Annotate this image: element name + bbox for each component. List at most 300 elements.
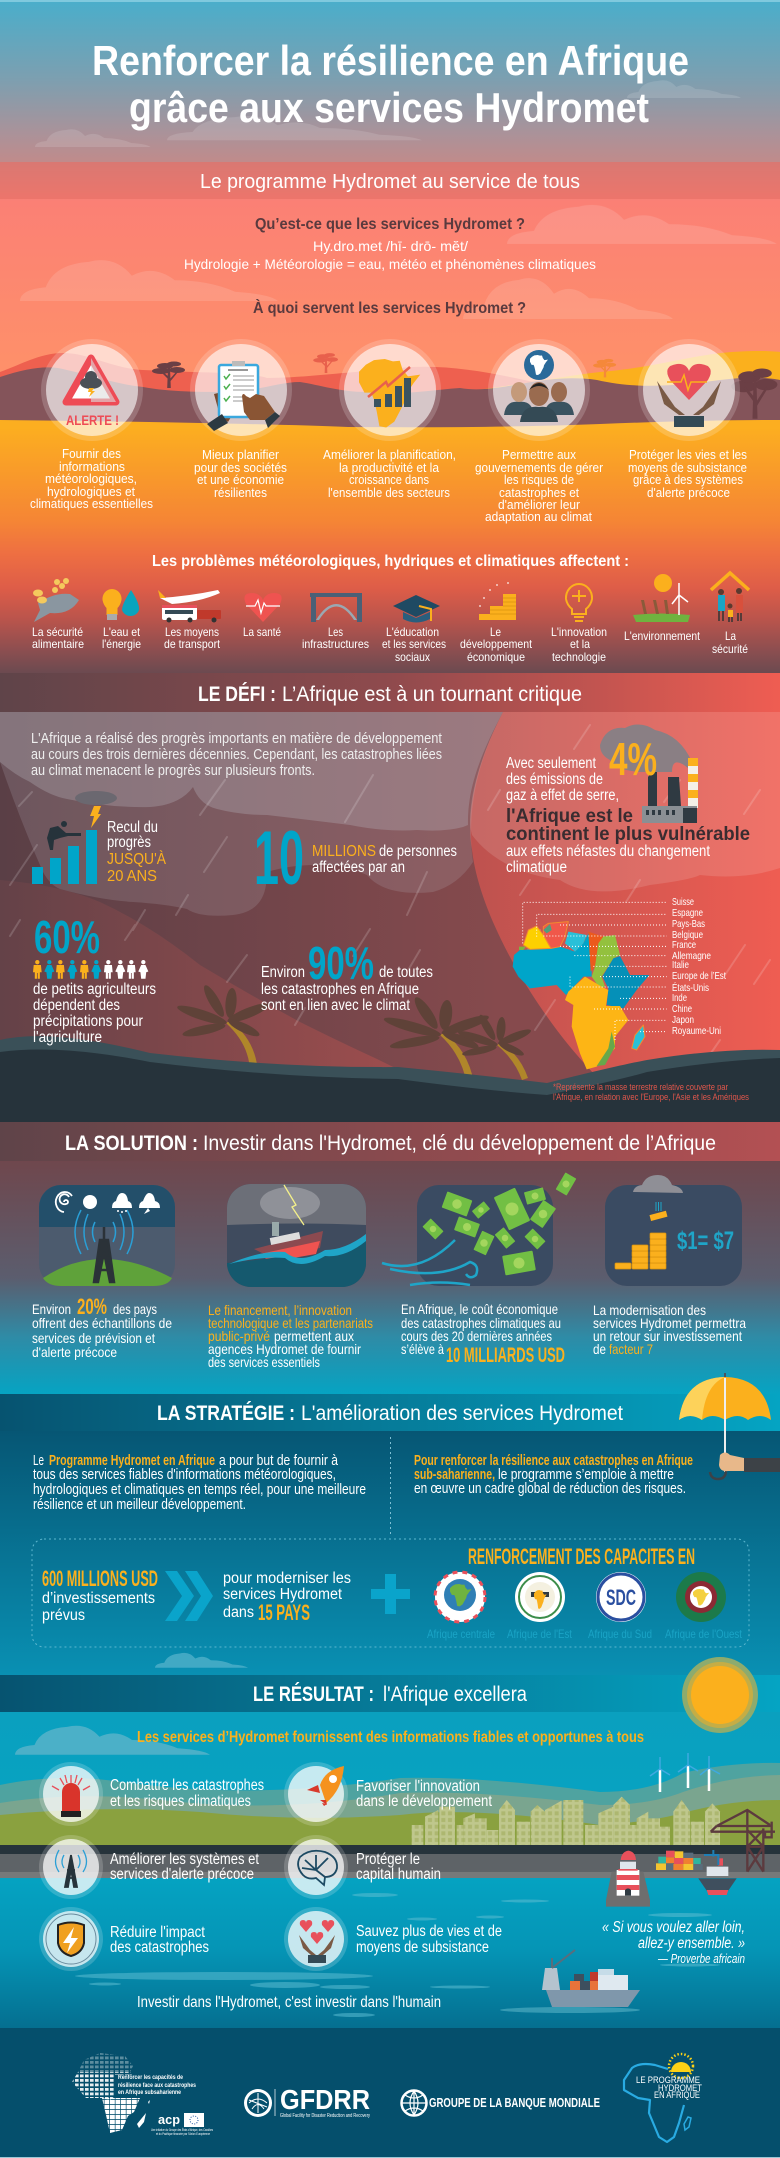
landscape hills [0,351,780,430]
caption: technologie [552,650,606,664]
caption: d'améliorer leur [498,498,580,512]
quote: — Proverbe africain [657,1951,745,1966]
logo: World Bank [402,2090,600,2116]
logo: west Africa: Afrique de l'Ouest [665,1627,743,1641]
panel: investment box [32,1539,749,1647]
icon: bridge [310,593,362,622]
alert label: ALERTE ! [66,412,119,428]
icon: clipboard [207,361,280,431]
stat: progress setback: progrès [107,834,151,851]
logo: southern Africa: Afrique du Sud [588,1627,652,1641]
logo: Hydromet Africa: EN AFRIQUE [654,2090,700,2101]
text: programme: tous des services fiables d'informations météorologiques, [33,1467,336,1483]
icon: plus [371,1574,410,1614]
intro text: au climat menacent le progrès sur plusieurs fronts. [31,763,315,779]
banner: la stratégie: L'amélioration des services Hydromet [301,1402,623,1425]
sector: security [711,573,749,656]
caption: Améliorer la planification, [323,448,456,462]
quote: « Si vous voulez aller loin, [602,1919,745,1936]
text: resilience framework: sub-saharienne, [414,1467,495,1483]
caption: résilientes [214,486,267,500]
caption [30,447,153,511]
logo: World Bank: GROUPE DE LA BANQUE MONDIALE [429,2096,600,2110]
sky band [0,162,780,199]
text: financing: agences Hydromet de fournir [208,1341,361,1357]
partner caption [151,2127,213,2136]
logo: resilience programme: en Afrique subsaharienne [118,2089,181,2096]
caption: La [725,629,736,643]
text: programme: Le [33,1453,44,1469]
icon: africa chart [359,359,420,427]
stat: progress setback: Recul du [107,819,158,836]
caption [382,625,446,664]
text: modernisation: facteur 7 [609,1341,653,1357]
caption: alimentaire [32,637,84,651]
stat: 90 percent: les catastrophes en Afrique [261,981,419,998]
item: combat disasters [39,1762,264,1826]
caption: Les [328,625,343,639]
icon: signal tower [56,1850,86,1887]
item: human capital [284,1835,441,1899]
stat: 60 percent: de petits agriculteurs [33,981,156,998]
text: programme: résilience et un meilleur développement. [33,1497,246,1513]
caption: et les services [382,637,446,651]
caption: croissance dans [349,473,429,487]
icon: coin stacks [615,1233,666,1269]
map legend: France [672,939,696,951]
text: resilience framework: le programme s’emploie à mettre [498,1467,674,1483]
icon: siren [52,1775,90,1817]
icon: brain network [298,1851,337,1885]
text: financing: technologique et les partenariats [208,1315,373,1331]
caption [323,448,456,500]
icon: alert triangle [66,358,116,402]
panel: use 3 growth [323,339,456,500]
icon: falling bars [32,791,117,884]
icon: coin stacks [479,582,516,620]
logo: central Africa: Afrique centrale [427,1627,495,1641]
item: warning systems: Améliorer les systèmes et [110,1851,260,1868]
text: resilience framework [414,1453,693,1497]
caption [302,625,369,651]
logo: Hydromet Africa: LE PROGRAMME [636,2075,700,2086]
map legend: Inde [672,992,687,1004]
sector: education [382,595,446,664]
icon: fish and beans [33,578,79,622]
text: economic cost [401,1301,565,1367]
text: modernisation [593,1302,746,1357]
icon: people row [33,960,148,979]
item: innovation: dans le développement [356,1793,493,1810]
footer [0,2028,780,2158]
panel: la solution [0,1122,780,1395]
caption [164,625,221,651]
stat: progress setback [32,791,167,885]
text: modernise: 15 PAYS [258,1600,310,1625]
caption: Fournir des [62,447,121,461]
text: economic cost: cours des 20 dernières années [401,1328,552,1344]
stat: 600 million [42,1566,158,1624]
stat: 4 percent emissions: l'Afrique est le [506,806,633,827]
sector: environment [624,574,701,643]
text: 20 percent: Environ [32,1301,71,1317]
icon: leaders [504,350,574,422]
map legend [672,896,726,1037]
stat: 60 percent: 60% [34,911,100,963]
caption [628,448,747,500]
cargo ship [500,1950,640,2013]
caption: d'alerte précoce [647,486,730,500]
stat: 4 percent emissions: Avec seulement [506,755,597,772]
trees [152,353,777,419]
banner: le résultat: LE RÉSULTAT : [253,1683,374,1706]
caption: La sécurité [32,625,83,639]
text: 20 percent: d'alerte précoce [32,1344,117,1360]
text: 20 percent: des pays [113,1301,157,1317]
panel: le résultat [0,1657,780,2028]
ship [698,1850,737,1895]
map legend: Chine [672,1003,692,1015]
caption: les risques de [504,473,574,487]
item: human capital: capital humain [356,1866,441,1883]
logo: east Africa [507,1572,573,1641]
text: modernise: services Hydromet [223,1586,343,1603]
partner caption: et du Pacifique financée par l'Union Européenne [156,2132,210,2136]
text: economic cost: des catastrophes climatiques au [401,1315,561,1331]
map legend: Europe de l’Est [672,970,726,982]
text: 20 percent: services de prévision et [32,1330,155,1346]
logo: resilience programme: Renforcer les capacités de [118,2074,183,2081]
ground top edge [0,420,780,430]
caption: adaptation au climat [485,510,592,524]
stat: 90 percent: de toutes [379,964,433,981]
sector: food [32,578,84,651]
panel: use 1 alert [30,339,153,511]
text: economic cost: 10 MILLIARDS USD [446,1344,565,1367]
text: services heading: Les services d’Hydromet fournissent des informations fiables et opportunes à tous [137,1729,644,1746]
text: financing: public-privé [208,1328,270,1344]
item: save lives [284,1907,502,1971]
card: forecast tower [39,1185,175,1286]
item: reduce impact: des catastrophes [110,1939,209,1956]
stat: 10 millions: MILLIONS [312,843,376,860]
item: reduce impact: Réduire l'impact [110,1924,206,1941]
caption: météorologiques, [45,472,137,486]
stat: progress setback: 20 ANS [107,868,157,885]
logo: ACP and EU [158,2112,204,2127]
logo: resilience programme: résilience face aux catastrophes [118,2082,196,2089]
definition block: Hy.dro.met /hī- drō- mĕt/ [313,238,468,254]
caption: sociaux [395,650,430,664]
intro text [31,731,442,779]
stat: 90 percent: Environ [261,964,305,981]
map legend: Italie [672,959,689,971]
logo: west Africa [665,1572,743,1641]
map legend: Espagne [672,907,703,919]
partner caption: Une initiative du Groupe des États d'Afrique, des Caraïbes [151,2127,213,2132]
item: save lives: Sauvez plus de vies et de [356,1923,502,1940]
item: human capital: Protéger le [356,1851,420,1868]
caption [712,629,748,656]
caption: informations [59,460,125,474]
text: 20 percent [32,1294,172,1360]
stat: 4 percent emissions: 4% [609,733,657,785]
background: solution [0,1161,780,1395]
text: resilience framework: en œuvre un cadre global de réduction des risques. [414,1481,686,1497]
stat: 10 millions: de personnes [379,843,457,860]
title: grâce aux services Hydromet [129,84,649,131]
background: orange ground [0,428,780,674]
text: modernise: pour moderniser les [223,1570,351,1587]
text: programme: a pour but de fournir à [219,1453,339,1469]
stat: 60 percent: l'agriculture [33,1029,102,1046]
icon: ship [254,1231,323,1258]
sector: transport [158,590,221,651]
small cloud [155,1653,248,1668]
card: ship in storm [227,1184,366,1287]
caption: l'énergie [102,637,141,651]
item: warning systems: services d'alerte précoce [110,1866,254,1883]
map footnote [553,1082,749,1103]
definition block: Hydrologie + Météorologie = eau, météo et phénomènes climatiques [184,256,596,272]
text: modernise [223,1570,351,1625]
logo: Hydromet Africa: HYDROMET [658,2083,702,2094]
caption: économique [467,650,525,664]
logo: GFDRR: Global Facility for Disaster Reduction and Recovery [280,2113,370,2119]
clouds [20,80,777,319]
lower storm cloud [0,712,503,916]
ground waves [0,1036,780,1122]
road [0,1845,780,1878]
text: modernisation: un retour sur investissement [593,1328,742,1344]
text: modernise: dans [223,1604,254,1621]
map legend: Pays-Bas [672,918,705,930]
icon: chevrons [165,1571,213,1621]
icon: plane, bus, truck [158,590,221,622]
text: financing: des services essentiels [208,1354,320,1370]
text: programme: hydrologiques et climatiques en temps réel, pour une meilleure [33,1482,366,1498]
icon: bulb outline [566,584,592,621]
sector: health [243,593,282,639]
icon: rocket [307,1766,344,1806]
card: money in wind [382,1172,576,1286]
map legend: Suisse [672,896,694,908]
text: modernisation: services Hydromet permettra [593,1315,746,1331]
map legend: Royaume-Uni [672,1025,721,1037]
upper storm cloud [0,712,503,831]
background: défi [0,712,780,1122]
caption: grâce à des systèmes [633,473,743,487]
banner: la solution: Investir dans l'Hydromet, clé du développement de l’Afrique [203,1132,716,1155]
stat: 4 percent emissions [506,724,750,876]
stat: 60 percent: précipitations pour [33,1013,143,1030]
icon: shield [46,1914,96,1964]
caption: L'innovation [551,625,607,639]
mountain [0,880,420,1080]
icon: umbrella and hand [679,1373,780,1479]
icon: banknotes [422,1172,576,1275]
text: financing: Le financement, l’innovation [208,1302,352,1318]
caption: L'environnement [624,629,701,643]
caption: sécurité [712,642,748,656]
stat: 4 percent emissions: climatique [506,859,567,876]
map legend: États-Unis [672,981,709,994]
sector: infrastructure [302,593,369,651]
caption: Le [490,625,501,639]
map footnote: *Représente la masse terrestre relative couverte par [553,1082,728,1093]
caption: Les moyens [165,625,219,639]
panel: use 2 planning [190,339,292,500]
banner: la solution [0,1122,780,1161]
palm trees [176,983,532,1085]
stat: 4 percent emissions: gaz à effet de serre, [506,787,619,804]
text: modernisation: de [593,1341,606,1357]
icon: weather [56,1192,160,1214]
logo: southern Africa: SDC [606,1585,636,1610]
banner: le défi [0,673,780,712]
icon: rain cloud [633,1175,683,1193]
stat: 4 percent emissions: aux effets néfastes du changement [506,843,711,860]
banner: la solution: LA SOLUTION : [65,1132,198,1155]
map: Africa land mass [513,902,667,1069]
intro text: L'Afrique a réalisé des progrès importants en matière de développement [31,731,442,747]
definition block [184,216,596,272]
icon: graduation cap [393,595,440,622]
rain [10,725,770,1116]
caption: moyens de subsistance [628,461,747,475]
logo: GFDRR: GFDRR [280,2084,370,2115]
stat: return: $1= $7 [677,1227,734,1255]
stat: 4 percent emissions: des émissions de [506,771,603,788]
caption: hydrologiques et [47,485,136,499]
text: 20 percent: 20% [77,1294,107,1319]
icon: wind [382,1240,477,1285]
caption [194,448,287,500]
caption: la productivité et la [339,461,439,475]
port crane [711,1810,775,1872]
map legend: Japon [672,1014,694,1026]
caption: Permettre aux [502,448,577,462]
containers [656,1851,703,1870]
wind turbines [650,1753,720,1792]
item: combat disasters: Combattre les catastrophes [110,1777,264,1794]
stat: 10 millions: 10 [254,816,304,901]
item: warning systems [39,1835,260,1899]
title [92,37,689,131]
background: strategy [0,1431,780,1675]
stat: 600 million: prévus [42,1607,85,1624]
panel: use 4 governments [475,339,603,524]
logo: Hydromet Africa [624,2054,702,2142]
icon: sun, plants, turbine [633,574,690,622]
item: innovation: Favoriser l'innovation [356,1778,480,1795]
sector: innovation [551,584,607,664]
right cloud [470,712,780,891]
caption [475,448,603,524]
banner: le résultat [0,1675,780,1712]
banner: la stratégie: LA STRATÉGIE : [157,1402,295,1425]
caption: gouvernements de gérer [475,461,603,475]
water ripples [75,1893,720,2017]
logo: central Africa [427,1572,495,1641]
stat: 10 millions [254,816,457,901]
logo: resilience programme [72,2053,213,2136]
panel: use 5 protect [628,339,747,500]
caption [102,625,141,651]
stat: 90 percent: 90% [308,937,374,989]
caption: Mieux planifier [202,448,279,462]
icon: signal waves [75,1210,133,1254]
sun [682,1657,758,1733]
quote [602,1919,745,1966]
icon: hands and hearts [299,1920,335,1963]
title: Renforcer la résilience en Afrique [92,37,689,84]
banner: la stratégie [0,1394,780,1431]
icon: bulb and drop [102,589,139,620]
item: combat disasters: et les risques climatiques [110,1793,251,1810]
caption: infrastructures [302,637,369,651]
text: financing [208,1302,373,1370]
stat: progress setback: JUSQU'À [107,851,167,868]
caption: La santé [243,625,281,639]
stat: 600 million: d’investissements [42,1590,155,1607]
item: reduce impact [39,1907,209,1971]
cloud [15,1726,210,1755]
item: innovation [284,1762,493,1826]
caption: catastrophes et [499,486,579,500]
dotted Africa [72,2053,150,2133]
text: economic cost: En Afrique, le coût économique [401,1301,558,1317]
stat: 600 million: 600 MILLIONS USD [42,1566,158,1591]
land hills [0,1763,780,1846]
icon: heart in hands [657,364,721,427]
caption: de transport [164,637,221,651]
quote: allez-y ensemble. » [638,1935,745,1952]
subtitle: Le programme Hydromet au service de tous [200,171,580,193]
stat: 10 millions: affectées par an [312,859,405,876]
heading: affected: Les problèmes météorologiques, hydriques et climatiques affectent : [152,553,629,570]
item: save lives: moyens de subsistance [356,1939,489,1956]
lighthouse [606,1851,650,1907]
map leader lines [523,902,667,1040]
caption [32,625,84,651]
text: 20 percent: offrent des échantillons de [32,1315,172,1331]
caption [551,625,607,664]
text: modernisation: La modernisation des [593,1302,706,1318]
heading: uses: À quoi servent les services Hydromet ? [253,298,526,317]
red circle [470,712,780,1080]
banner: le défi: L’Afrique est à un tournant critique [282,683,582,706]
banner: le résultat: l'Afrique excellera [383,1683,527,1706]
stat: 90 percent [261,937,433,1014]
caption: développement [460,637,533,651]
icon: family under roof [711,573,749,622]
icon: heart [244,593,282,622]
map regions [513,922,649,1069]
intro text: au cours des trois dernières décennies. Cependant, les catastrophes liées [31,747,442,763]
city skyline [412,1797,720,1845]
text: programme [33,1453,366,1513]
card: coin return [605,1175,742,1286]
caption: l'ensemble des secteurs [328,486,450,500]
caption: et la [570,637,590,651]
background: sky [0,0,780,420]
panel: le défi [0,673,780,1122]
icon: factory [600,724,698,823]
sector: water energy [102,589,141,651]
stat: 60 percent [33,911,156,1046]
logo: southern Africa [588,1572,652,1641]
